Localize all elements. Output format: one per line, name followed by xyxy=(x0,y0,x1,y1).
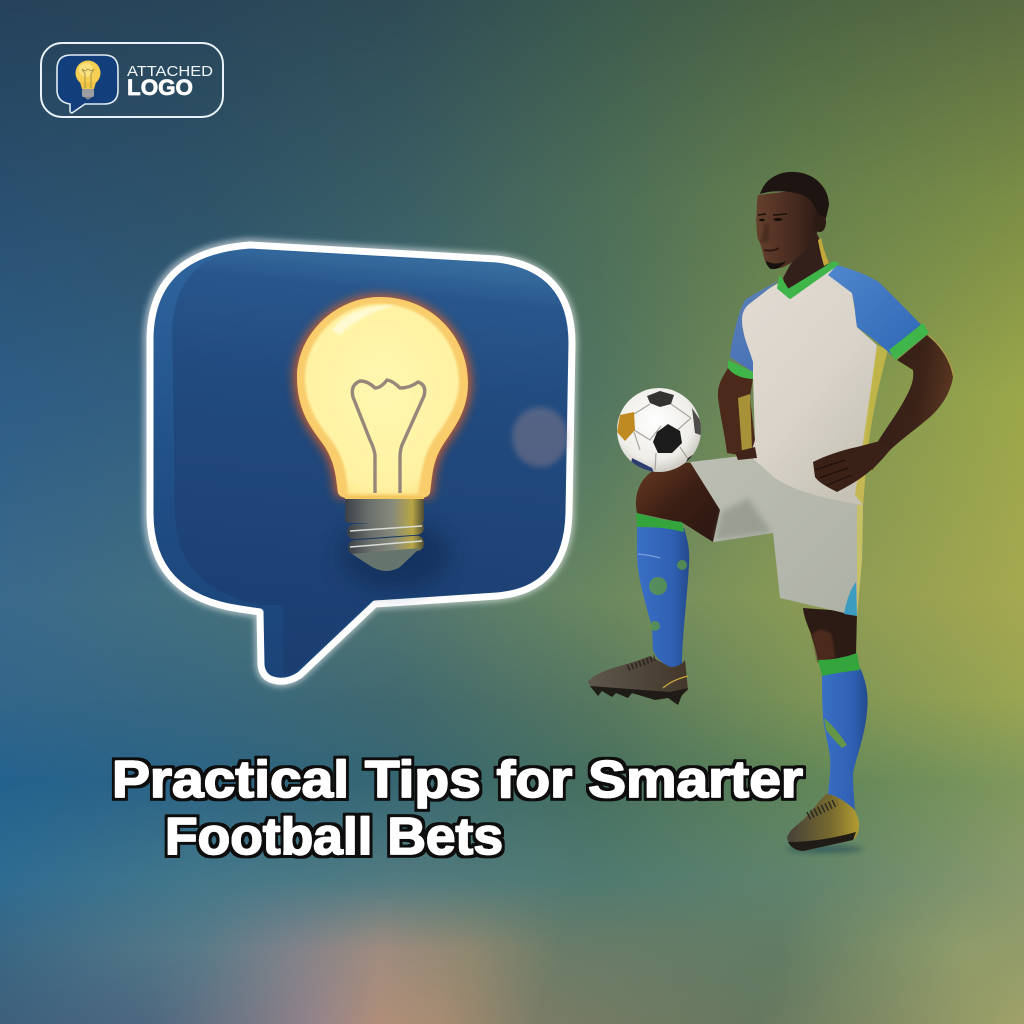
ear xyxy=(814,212,826,232)
mouth xyxy=(764,248,779,251)
filament xyxy=(352,380,425,493)
icon: soccer ball xyxy=(617,388,703,475)
bubble outline glow xyxy=(148,243,573,682)
football player xyxy=(588,172,954,853)
standing boot xyxy=(787,794,859,851)
title: Football Bets xyxy=(165,808,503,866)
bulb inner light xyxy=(305,304,459,494)
raised thigh xyxy=(636,463,722,542)
bulb screw base xyxy=(345,496,424,571)
shorts xyxy=(690,455,863,616)
logo badge xyxy=(41,43,223,117)
logo wordmark: LOGO xyxy=(127,75,193,100)
far arm xyxy=(718,368,757,458)
standing sock xyxy=(822,668,868,810)
logo icon: speech bubble with bulb xyxy=(57,55,118,113)
shadow under bulb xyxy=(340,520,450,590)
logo wordmark xyxy=(127,64,213,100)
goatee xyxy=(766,261,786,269)
yellow rim light near arm xyxy=(738,394,752,452)
right sleeve xyxy=(828,265,926,358)
left sleeve xyxy=(730,280,780,372)
title: Practical Tips for Smarter xyxy=(112,751,803,809)
hair xyxy=(760,172,829,218)
near arm xyxy=(860,335,953,470)
standing leg xyxy=(787,608,868,851)
lens flare spot xyxy=(512,407,568,467)
bubble white outline and side xyxy=(150,245,572,681)
torso shirt xyxy=(728,262,929,505)
head xyxy=(756,172,829,269)
title xyxy=(112,751,803,866)
eyes and brows xyxy=(758,214,787,215)
speech bubble with light bulb xyxy=(148,243,573,682)
bulb glow xyxy=(294,295,471,497)
raised boot xyxy=(588,656,688,705)
icon: light bulb xyxy=(294,295,471,571)
ground shadow xyxy=(787,845,863,853)
far hand xyxy=(735,447,757,460)
bulb highlight xyxy=(332,305,395,335)
bubble front face xyxy=(172,250,568,674)
raised leg sock xyxy=(636,513,689,667)
shorts under shade xyxy=(715,498,772,540)
near arm rim light xyxy=(928,335,954,377)
logo wordmark: ATTACHED xyxy=(127,64,213,80)
nose shadow xyxy=(760,224,769,242)
sleeve cuffs xyxy=(728,360,753,379)
shirt side rim light xyxy=(855,345,888,505)
neck xyxy=(783,232,829,297)
bulb glass xyxy=(297,297,468,498)
collar xyxy=(778,262,838,298)
near hand on hip xyxy=(813,441,890,492)
